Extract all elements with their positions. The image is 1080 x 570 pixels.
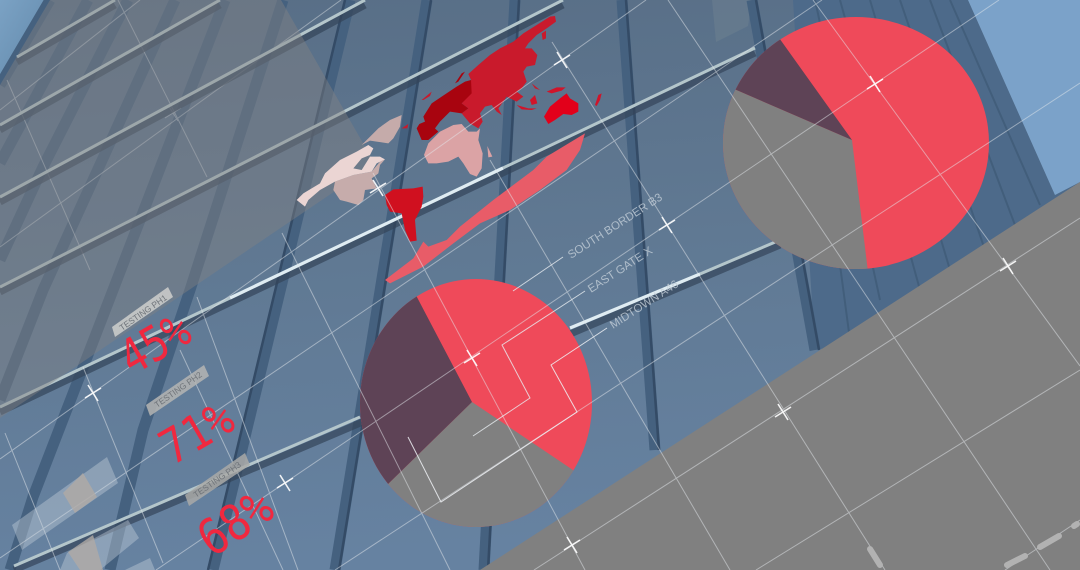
horizontal transoms (0, 0, 780, 570)
translucent grey overlay panel (0, 0, 375, 418)
world map (297, 16, 602, 283)
translucent bars lower left (12, 457, 155, 570)
pie chart: lower centre (360, 279, 592, 527)
vertical mullions (0, 0, 819, 570)
Asia (462, 16, 556, 128)
callout: East Gate X: EAST GATE X (586, 245, 655, 296)
Australia (544, 93, 578, 124)
callout: South Border B3: SOUTH BORDER B3 (566, 192, 665, 262)
Europe (417, 80, 472, 140)
callout: South Border B3 (513, 192, 665, 291)
Canada and Alaska (297, 145, 385, 207)
Madagascar (487, 146, 492, 157)
stat: Testing PH1 45%: TESTING PH1 (117, 292, 169, 333)
islands (402, 31, 602, 128)
stat: Testing PH2 71%: 71% (150, 389, 244, 476)
sky right (968, 0, 1080, 195)
grey foreground band (480, 182, 1080, 570)
Greenland (362, 115, 402, 145)
stat: Testing PH3 68%: 68% (187, 477, 283, 568)
stat: Testing PH2 71%: TESTING PH2 (152, 369, 204, 410)
stat: Testing PH1 45%: 45% (110, 302, 200, 386)
callout: Midtown A46: MIDTOWN A46 (608, 278, 681, 332)
Antarctica stretched (385, 133, 585, 283)
dashes lower right (870, 524, 1077, 565)
USA and Mexico (333, 159, 385, 205)
stat: Testing PH3 68%: TESTING PH3 (191, 459, 243, 500)
South America (385, 187, 423, 242)
callout: Midtown A46 (408, 278, 681, 502)
faint grid lines behind grey overlay (0, 0, 341, 270)
grid crosses (85, 52, 1016, 553)
Africa (424, 124, 483, 177)
callout: East Gate X (473, 245, 655, 436)
sky left corner (0, 0, 50, 85)
pie chart: upper right (723, 17, 989, 269)
